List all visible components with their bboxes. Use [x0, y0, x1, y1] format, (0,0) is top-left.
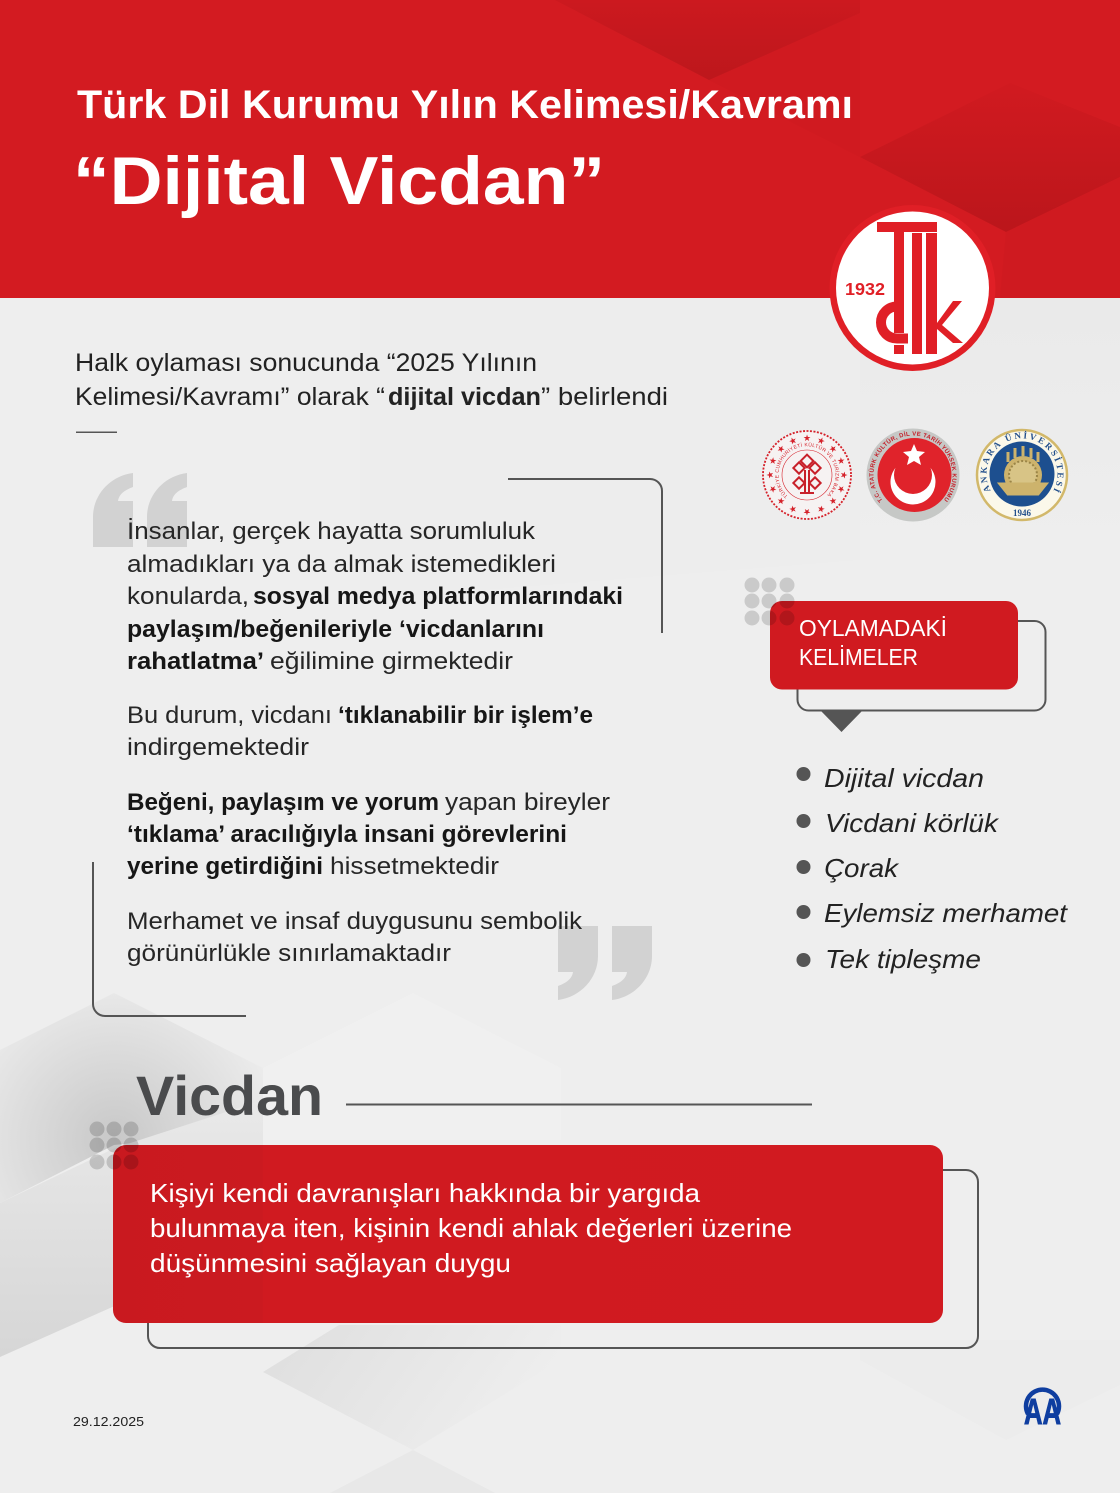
word list: Eylemsiz merhamet — [824, 898, 1069, 928]
title — [73, 83, 853, 219]
panel: words in the vote — [744, 578, 1069, 974]
quote paragraph 4: görünürlükle sınırlamaktadır — [127, 940, 451, 967]
intro text — [75, 349, 668, 411]
quote paragraph 3: yerine getirdiğini — [127, 853, 323, 880]
quote paragraph 1: konularda, — [127, 583, 249, 610]
closing quote mark — [558, 926, 652, 1000]
icon: TDK logo — [830, 205, 996, 371]
icon: Ministry of Culture seal: ★ — [787, 435, 798, 447]
icon: Ministry of Culture seal: ★ — [827, 442, 840, 455]
word list: Dijital vicdan — [824, 763, 984, 793]
icon: Ministry of Culture seal: ★ — [839, 471, 849, 479]
icon: Ministry of Culture seal: ★ — [765, 471, 775, 479]
definition text: Kişiyi kendi davranışları hakkında bir yargıda — [150, 1178, 701, 1208]
intro text: Kelimesi/Kavramı” olarak “ — [75, 383, 385, 411]
icon: Ministry of Culture seal: ★ — [835, 455, 847, 466]
heading text — [799, 615, 947, 670]
icon: Ankara University seal — [976, 428, 1068, 522]
icon: AA logo — [1024, 1390, 1061, 1432]
intro text: dijital vicdan — [388, 383, 541, 411]
heading: Vicdan: Vicdan — [136, 1064, 323, 1127]
panel: definition of vicdan — [90, 1064, 978, 1348]
dot pattern — [90, 1122, 138, 1170]
quote paragraph 1: eğilimine girmektedir — [270, 648, 513, 675]
quote paragraph 4: Merhamet ve insaf duygusunu sembolik — [127, 908, 583, 935]
icon: Ministry of Culture seal — [762, 430, 852, 520]
quote paragraph 1: paylaşım/beğenileriyle ‘vicdanlarını — [127, 616, 544, 643]
icon: Ministry of Culture seal: ★ — [827, 495, 840, 508]
icon: Ministry of Culture seal: ★ — [767, 484, 779, 495]
icon: Ankara University seal: ANKARA ÜNİVERSİTESİ — [980, 430, 1064, 493]
quote paragraph 4 — [127, 908, 583, 967]
quote paragraph 1: İnsanlar, gerçek hayatta sorumluluk — [127, 518, 536, 545]
icon: Ministry of Culture seal: ★ — [774, 495, 787, 508]
quote paragraph 1: rahatlatma’ — [127, 648, 264, 675]
quote paragraph 3: hissetmektedir — [330, 853, 499, 880]
opening quote mark — [93, 473, 187, 547]
date: 29.12.2025 — [73, 1414, 144, 1429]
quote paragraph 2: indirgemektedir — [127, 734, 309, 761]
icon: Ministry of Culture seal: ★ — [774, 442, 787, 455]
red heading box — [770, 601, 1018, 690]
icon: Ministry of Culture seal: ★ — [767, 455, 779, 466]
word list: Çorak — [824, 853, 900, 883]
quote paragraph 1 — [127, 518, 623, 675]
title line 2: “Dijital Vicdan” — [73, 143, 605, 219]
heading text: KELİMELER — [799, 644, 918, 670]
quote paragraph 2: ‘tıklanabilir bir işlem’e — [338, 702, 593, 729]
definition text — [150, 1178, 792, 1278]
dot pattern — [744, 578, 794, 626]
quote paragraph 3: Beğeni, paylaşım ve yorum — [127, 789, 439, 816]
intro text: Halk oylaması sonucunda “2025 Yılının — [75, 349, 537, 377]
heading text: OYLAMADAKİ — [799, 615, 947, 641]
outline box — [148, 1170, 978, 1348]
icon: Ministry of Culture seal: ★ — [803, 507, 811, 517]
icon: Atatürk High Institution seal: T.C. ATATÜRK KÜLTÜR, DİL VE TARİH YÜKSEK KURUMU — [868, 431, 957, 503]
title line 1: Türk Dil Kurumu Yılın Kelimesi/Kavramı — [77, 83, 853, 127]
word list: Tek tipleşme — [825, 944, 981, 974]
icon: Ministry of Culture seal: ★ — [787, 503, 798, 515]
quote paragraph 1: almadıkları ya da almak istemedikleri — [127, 551, 556, 578]
icon: TDK logo: 1932 — [845, 279, 885, 299]
header band — [0, 0, 1120, 298]
icon: AA logo: AA — [1024, 1391, 1061, 1432]
quote paragraph 3: ‘tıklama’ aracılığıyla insani görevlerini — [127, 821, 567, 848]
icon: Ankara University seal: 1946 — [1013, 508, 1032, 518]
red definition box — [113, 1145, 943, 1323]
word list: Vicdani körlük — [825, 808, 1000, 838]
quote paragraph 2: Bu durum, vicdanı — [127, 702, 332, 729]
icon: Ministry of Culture seal: TÜRKİYE CUMHURİYETİ KÜLTÜR VE TURİZM BAKANLIĞI — [775, 442, 840, 498]
quote paragraph 2 — [127, 702, 593, 761]
outline box with pointer — [798, 621, 1046, 732]
icon: Ministry of Culture seal: ★ — [816, 503, 827, 515]
quotation panel — [93, 473, 662, 1016]
quote paragraph 1: sosyal medya platformlarındaki — [253, 583, 623, 610]
icon: Ministry of Culture seal: ★ — [803, 433, 811, 443]
quote paragraph 3: yapan bireyler — [445, 789, 610, 816]
word list — [796, 763, 1069, 974]
intro text: ” belirlendi — [541, 383, 668, 411]
definition text: bulunmaya iten, kişinin kendi ahlak değerleri üzerine — [150, 1213, 792, 1243]
icon: Ministry of Culture seal: ★ — [816, 435, 827, 447]
quote paragraph 3 — [127, 789, 610, 880]
icon: Ministry of Culture seal: ★ — [835, 484, 847, 495]
definition text: düşünmesini sağlayan duygu — [150, 1248, 511, 1278]
quote frame — [93, 479, 662, 1016]
